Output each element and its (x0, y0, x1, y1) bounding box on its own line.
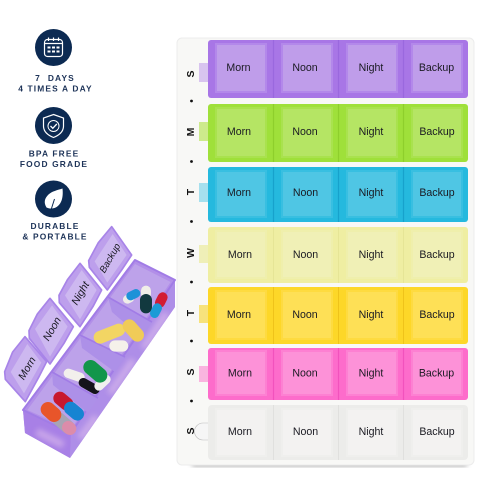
labels: Night (359, 62, 383, 74)
labels: Noon (292, 126, 318, 138)
wall glow (37, 313, 167, 445)
open purple pill box (5, 227, 175, 458)
row: teal Tuesday (208, 167, 468, 222)
row tabs (194, 63, 208, 440)
box lids (5, 227, 132, 402)
feature text: 4 TIMES A DAY (18, 84, 93, 94)
day letters: M (185, 127, 197, 136)
labels: Noon (292, 368, 318, 380)
labels: Night (359, 368, 383, 380)
capsules: backup (127, 291, 163, 313)
organizer board (177, 38, 474, 465)
day letters: W (185, 248, 197, 258)
lid: Noon (29, 298, 73, 364)
capsules: morning (48, 398, 77, 429)
labels: Morn (228, 426, 252, 438)
lid: Noon: Noon (41, 315, 64, 343)
labels: Morn (228, 249, 252, 261)
labels: Backup (419, 126, 455, 138)
day letters (185, 70, 197, 435)
labels: Backup (419, 249, 455, 261)
feature text: & PORTABLE (22, 232, 88, 242)
dots between days (190, 100, 193, 402)
labels: Morn (226, 62, 251, 74)
labels: Backup (419, 426, 455, 438)
labels: Night (359, 126, 383, 138)
compartment dividers (52, 297, 152, 413)
icon: calendar (35, 29, 72, 66)
labels: Night (359, 309, 383, 321)
labels: Noon (293, 249, 318, 261)
feature text: FOOD GRADE (20, 159, 88, 169)
lid: Morn (5, 337, 47, 402)
labels: Backup (419, 187, 455, 199)
labels: Noon (292, 62, 318, 74)
lid: Backup: Backup (98, 241, 124, 275)
feature text: 7 DAYS (35, 73, 75, 83)
pills (48, 291, 163, 429)
labels: Backup (419, 368, 454, 380)
rim (23, 260, 175, 433)
feature text: DURABLE (30, 221, 80, 231)
capsules: noon (68, 367, 106, 389)
lid: Backup (89, 227, 132, 290)
long side wall (70, 280, 175, 458)
labels: Night (359, 426, 383, 438)
row: yellow Thursday (208, 287, 468, 344)
feature: BPA free food grade (20, 107, 88, 169)
feature text: BPA FREE (29, 148, 79, 158)
day letters: S (185, 70, 197, 78)
organizer board shadow (192, 458, 467, 466)
labels: Night (359, 249, 383, 261)
lid: Night: Night (69, 279, 93, 307)
labels: Morn (228, 368, 252, 380)
labels: Noon (293, 426, 318, 438)
row: pink Friday (208, 348, 468, 400)
day letters: S (185, 427, 197, 435)
row: white Saturday (208, 405, 468, 460)
labels: Noon (292, 309, 318, 321)
icon: shield with check (35, 107, 72, 144)
box body (23, 260, 175, 458)
labels: Backup (419, 309, 455, 321)
feature: 7 days 4 times a day (18, 29, 93, 94)
labels: Night (359, 187, 383, 199)
lid: Night (59, 263, 102, 327)
day letters: T (185, 309, 197, 316)
near end wall (23, 410, 71, 458)
capsules: night (100, 326, 137, 346)
labels: Backup (419, 62, 454, 74)
icon: leaf (35, 180, 72, 218)
day letters: S (185, 368, 197, 376)
lid: Morn: Morn (16, 355, 39, 382)
labels: Noon (293, 187, 318, 199)
labels: Morn (227, 309, 251, 321)
labels: Morn (227, 187, 251, 199)
row: pale yellow Wednesday (208, 227, 468, 283)
feature: durable and portable (22, 180, 88, 242)
row: purple Sunday (208, 40, 468, 98)
day letters: T (185, 188, 197, 195)
row: green Monday (208, 104, 468, 162)
labels: Morn (227, 126, 251, 138)
